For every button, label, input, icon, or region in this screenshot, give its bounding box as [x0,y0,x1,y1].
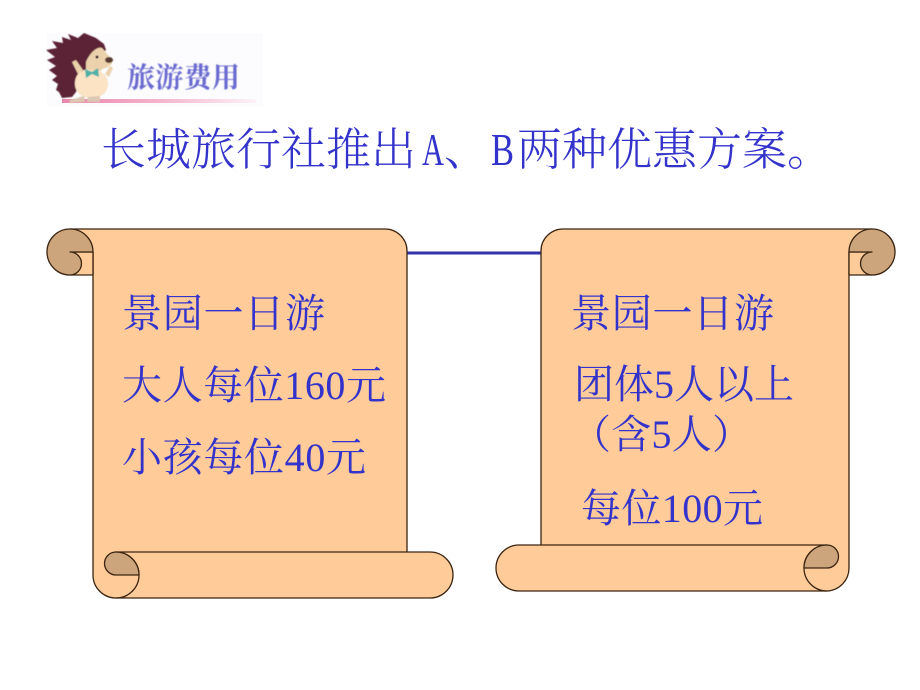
plan A text: 大人每位160元 [122,363,386,408]
panel: plan A scroll [47,229,453,598]
plan B text: （含5人） [571,412,752,457]
panel: plan B scroll [496,229,895,591]
badge label: 旅游费用 [127,62,240,94]
plan A text: 景园一日游 [122,291,325,336]
scroll B bottom roll [541,545,839,591]
plan B text: 每位100元 [581,486,763,531]
header badge: travel costs [46,33,263,107]
scroll A bottom roll [105,552,407,598]
title: 、 [444,125,489,175]
scroll A body [70,229,453,598]
plan B text: 景园一日游 [571,291,774,336]
title [101,125,832,175]
icon: hedgehog mascot [46,33,113,103]
plan B text: 团体5人以上 [574,362,794,407]
title: B [491,125,514,175]
plan A text [122,291,386,480]
pink underline [62,99,256,103]
title: 长城旅行社推出 [101,125,416,175]
scroll A top roll [47,229,93,275]
connector line between scrolls [405,252,543,254]
plan A text: 小孩每位40元 [122,435,366,480]
title: A [422,125,444,175]
plan B text [571,291,794,531]
title: 两种优惠方案。 [517,125,832,175]
scroll B body [496,229,872,591]
scroll B top roll [849,229,895,275]
